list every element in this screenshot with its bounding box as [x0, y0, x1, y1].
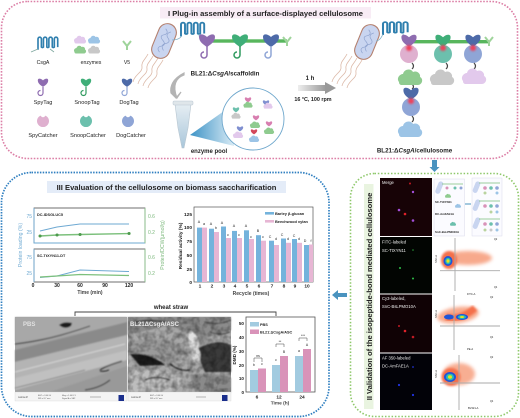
- legend: components: CsgA: [37, 60, 50, 66]
- image: AF350 microscopy: AF 350-labeled: [382, 356, 411, 360]
- bar chart: DMD: **: [279, 340, 282, 344]
- image: FITC microscopy: FITC-labeled: [382, 240, 407, 244]
- bar chart: DMD: 50: [239, 321, 244, 326]
- image: Cy3 microscopy: [380, 294, 432, 352]
- image: SEM PBS: [15, 317, 127, 401]
- bar chart: residual activity: D: [304, 239, 307, 243]
- bar chart: residual activity: Beechwood xylan: [275, 219, 308, 224]
- arrow: reaction: [294, 76, 336, 103]
- panel: I plug-in assembly: [2, 2, 518, 158]
- bar chart: residual activity: c: [238, 233, 240, 237]
- flow plot: FITC: [434, 238, 500, 296]
- bar chart: residual activity: 1: [199, 284, 202, 290]
- image: SEM PBS: WD = 8.7 mm: [38, 398, 51, 400]
- bars: DMD values: [250, 349, 311, 392]
- image: Cy3 microscopy: Cy3-labeled,: [382, 296, 406, 301]
- flow plot: Cy3: Q4: [490, 336, 494, 339]
- bar chart: DMD: c: [275, 358, 277, 362]
- line chart: protein loading: 30: [54, 283, 60, 289]
- flow plot: FITC: Q4: [494, 286, 498, 289]
- flow plot: Cy3: SSC-A: [434, 310, 438, 318]
- bar chart: DMD: [232, 317, 315, 406]
- bar chart: residual activity: A: [233, 224, 236, 228]
- diagram: modules left: SC-TtXYN11: [435, 200, 452, 204]
- line chart: protein loading: 25: [26, 230, 32, 236]
- arrow: curved gray to tube: [171, 73, 184, 98]
- diagram: modules left: SnC-BsLPMO10A: [435, 230, 460, 234]
- bar chart: DMD: 20: [239, 363, 244, 368]
- bar chart: residual activity: 25: [187, 267, 192, 273]
- image: FITC microscopy: [380, 237, 432, 294]
- bar chart: residual activity: c: [262, 235, 264, 239]
- image: SEM PBS: EHT = 3.00 kV: [38, 395, 52, 397]
- label: wheat straw bracket: wheat straw: [153, 305, 188, 311]
- illustration: BL21 cellulosome: [332, 22, 493, 137]
- bar chart: DMD: a: [298, 349, 300, 353]
- bar chart: DMD: 12: [276, 394, 282, 400]
- bar chart: residual activity: 0: [189, 280, 192, 286]
- bar chart: DMD: 24: [299, 394, 305, 400]
- line chart: protein loading: 25: [26, 271, 32, 277]
- diagram: modules left: [434, 179, 464, 236]
- image: SEM treated: WD = 8.7 mm: [150, 398, 163, 400]
- line chart: protein loading: 0: [32, 283, 35, 289]
- bar chart: residual activity: 50: [187, 253, 192, 259]
- arrow: modules to assemblies: [465, 203, 471, 205]
- panel: III evaluation: [2, 172, 329, 416]
- line chart: protein loading: 0.2: [148, 230, 155, 236]
- bar chart: DMD: ***: [301, 334, 306, 338]
- bar chart: DMD: ns: [256, 354, 260, 358]
- image: AF350 microscopy: [380, 354, 432, 410]
- legend: components: DogTag: [119, 100, 139, 106]
- flow plot: FITC: SSC-A: [434, 255, 438, 263]
- bar chart: residual activity: [178, 207, 313, 297]
- legend: components: V5: [124, 60, 130, 66]
- bar chart: DMD: 10: [239, 376, 244, 381]
- label: wheat straw bracket: [75, 305, 276, 316]
- bar chart: residual activity: 10: [304, 284, 310, 290]
- line chart: protein loading: 75: [26, 214, 32, 220]
- legend: components: enzymes: [81, 60, 102, 66]
- image: merge microscopy: Merge: [382, 180, 395, 185]
- line chart: protein loading: Protein loading (%): [18, 223, 24, 267]
- label: cellulosome strain: BL21:ΔCsgA/cellulosome: [377, 148, 453, 154]
- bar chart: residual activity: A: [198, 220, 201, 224]
- image: AF350 microscopy: DC-AmFAE1A: [382, 364, 409, 368]
- flow plot: Cy3: [434, 295, 500, 351]
- line chart: protein loading: DC-IDSGLUC5: [37, 213, 63, 217]
- bar chart: DMD: PBS: [260, 323, 268, 327]
- bar chart: residual activity: d: [275, 237, 277, 241]
- diagram: assemblies right: [472, 178, 502, 236]
- bar chart: DMD: BL21:ΔCsgA/ASC: [260, 330, 293, 334]
- bar chart: residual activity: C: [281, 233, 284, 237]
- image: SEM treated: wstraw.tif: [131, 396, 141, 399]
- bar chart: residual activity: 4: [234, 284, 237, 290]
- bar chart: residual activity: 125: [184, 212, 192, 218]
- image: SEM PBS: PBS: [23, 322, 35, 328]
- line chart: protein loading: 0.2: [148, 271, 155, 277]
- flow plot: AF350: Q4: [490, 400, 494, 403]
- bar chart: residual activity: d: [287, 237, 289, 241]
- bars: beechwood xylan: [202, 228, 313, 282]
- image: merge microscopy: [380, 178, 432, 236]
- line chart: protein loading: Time (min): [77, 290, 103, 296]
- bar chart: DMD: c: [261, 362, 263, 366]
- label: scaffoldin strain: BL21:ΔCsgA/scaffoldin: [191, 70, 260, 78]
- bar chart: residual activity: Recycle (times): [233, 291, 270, 297]
- image: SEM treated: BL21ΔCsgA/ASC: [130, 322, 180, 328]
- bar chart: residual activity: Barley β-glucan: [275, 211, 305, 216]
- flow plot: Cy3: Q2: [490, 296, 494, 299]
- bar chart: residual activity: A: [245, 224, 248, 228]
- heading: panel II: II Validation of the isopeptide-bond mediated cellulosome: [365, 193, 374, 400]
- bar chart: residual activity: f: [310, 239, 312, 243]
- bar chart: residual activity: c: [250, 235, 252, 239]
- flow plot: AF350: BV421-A: [468, 406, 479, 410]
- bar chart: residual activity: C: [293, 234, 296, 238]
- image: FITC microscopy: SC-TtXYN11: [382, 248, 407, 253]
- bar chart: residual activity: 9: [294, 284, 297, 290]
- image: SEM PBS: Mag = 1.00 K X: [62, 395, 77, 397]
- bar chart: residual activity: A: [221, 221, 224, 225]
- bar chart: residual activity: 2: [211, 284, 214, 290]
- arrow: down to panel II: [430, 160, 440, 172]
- diagram: modules left: DC-AmFAE1A: [435, 212, 455, 216]
- bar chart: DMD: Time (h): [271, 400, 290, 406]
- bar chart: DMD: B: [283, 350, 286, 354]
- legend: components: [28, 36, 146, 139]
- heading: panel III: III Evaluation of the cellulosome on biomass saccharification: [57, 183, 277, 192]
- bar chart: residual activity: 6: [258, 284, 261, 290]
- line chart: protein loading: 120: [125, 283, 133, 289]
- line chart: protein loading: 0.6: [148, 255, 155, 261]
- bar chart: residual activity: b: [215, 226, 217, 230]
- bar chart: residual activity: Residual activity (%): [178, 222, 184, 269]
- bar chart: residual activity: 7: [271, 284, 274, 290]
- bar chart: residual activity: d: [298, 237, 300, 241]
- flow plot: AF350: SSC-A: [434, 370, 438, 378]
- bars: barley beta-glucan: [197, 226, 309, 282]
- flow plot: FITC: FITC-A: [467, 292, 476, 296]
- image: Cy3 microscopy: SnC-BsLPMO10A: [382, 304, 416, 309]
- bar chart: residual activity: 3: [223, 284, 226, 290]
- arrow: reaction: 16 °C, 100 rpm: [294, 97, 332, 103]
- bar chart: DMD: 30: [239, 349, 244, 354]
- line chart: protein loading: 60: [77, 283, 83, 289]
- flow plot: Cy3: PE-A: [467, 347, 473, 351]
- image: SEM treated: EHT = 3.00 kV: [150, 395, 164, 397]
- bar chart: residual activity: c: [227, 233, 229, 237]
- bar chart: residual activity: C: [269, 235, 272, 239]
- bar chart: residual activity: B: [257, 229, 260, 233]
- bar chart: residual activity: 8: [283, 284, 286, 290]
- flow plot: AF350: Q2: [490, 356, 494, 359]
- panel: II validation: [350, 174, 518, 416]
- arrow: reaction: 1 h: [306, 76, 315, 82]
- legend: components: SpyCatcher: [28, 133, 58, 139]
- illustration: BL21 scaffoldin bacterium: [133, 21, 291, 88]
- flow plot: AF350: [434, 355, 500, 410]
- line chart: protein loading: [18, 208, 166, 296]
- heading: panel III: [47, 181, 286, 193]
- image: SEM PBS: wstraw.tif: [18, 396, 28, 399]
- bar chart: residual activity: a: [203, 222, 205, 226]
- cone: zoom from tube to pool: [190, 104, 234, 146]
- bar chart: DMD: 0: [241, 390, 244, 395]
- image: SEM treated: [128, 317, 231, 401]
- bar chart: residual activity: 100: [184, 225, 192, 231]
- bar chart: residual activity: A: [210, 222, 213, 226]
- bar chart: DMD: A: [306, 343, 309, 347]
- bar chart: DMD: 40: [239, 335, 244, 340]
- heading: panel I: I Plug-in assembly of a surface-displayed cellulosome: [168, 9, 363, 18]
- label: enzyme pool: enzyme pool: [191, 149, 228, 155]
- line chart: protein loading: 0.6: [148, 214, 155, 220]
- illustration: enzyme pool circle: [222, 88, 284, 150]
- flow plot: FITC: Q2: [494, 238, 498, 241]
- bar chart: DMD: DMD (%): [232, 345, 237, 364]
- legend: components: SpyTag: [34, 100, 52, 106]
- bar chart: residual activity: 75: [187, 239, 192, 245]
- legend: components: SnoopCatcher: [70, 133, 106, 139]
- line chart: protein loading: SC-TtXYN11-DT: [37, 254, 66, 258]
- bar chart: DMD: 6: [256, 394, 259, 400]
- image: SEM PBS: Signal A = SE2: [62, 397, 76, 400]
- icon: enzyme tube: [173, 101, 193, 148]
- legend: components: DogCatcher: [116, 133, 146, 139]
- line chart: protein loading: 90: [102, 283, 108, 289]
- line chart: protein loading: 75: [26, 255, 32, 261]
- arrow: from panel II to panel III: [332, 290, 347, 300]
- bar chart: DMD: b: [253, 363, 255, 367]
- bar chart: residual activity: 5: [246, 284, 249, 290]
- legend: components: SnoopTag: [74, 100, 100, 106]
- line chart: protein loading: Protein/DCW(μmol/g): [160, 220, 166, 270]
